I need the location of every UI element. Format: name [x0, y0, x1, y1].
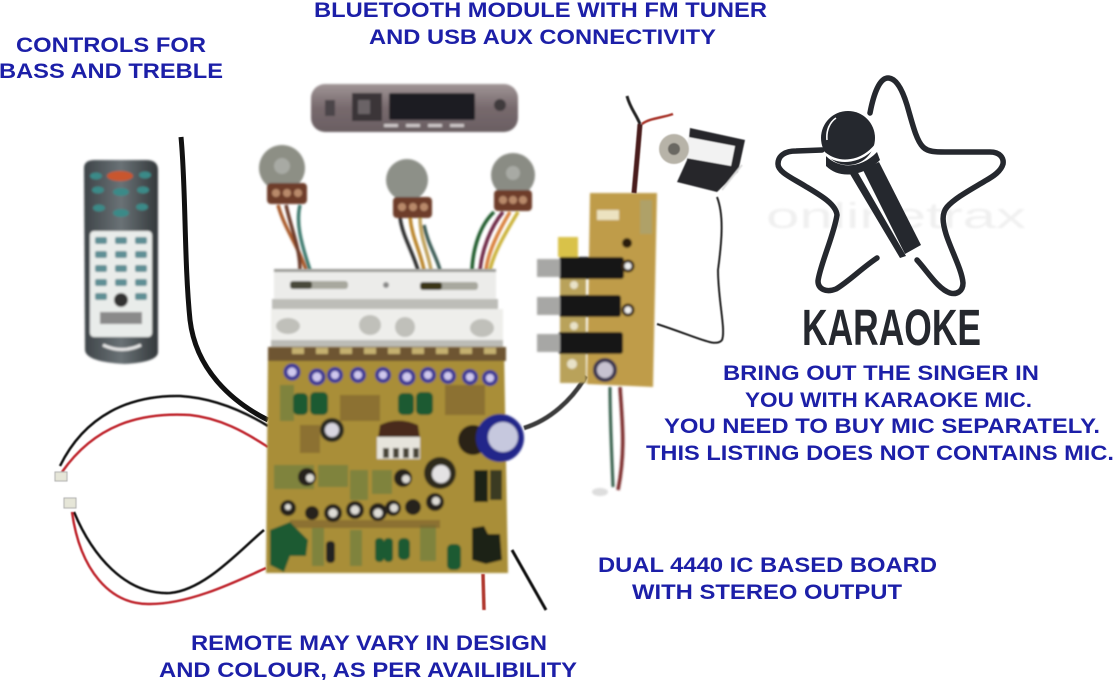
left speaker wires [55, 396, 268, 604]
potentiometers with wires [259, 145, 535, 270]
text: karaoke note: YOU NEED TO BUY MIC SEPARATELY. [664, 415, 1100, 438]
big capacitor [458, 425, 488, 455]
text: dual 4440 board [598, 554, 937, 604]
microphone [821, 111, 921, 258]
jack input board [537, 193, 657, 496]
amplifier board [266, 269, 524, 573]
circuit board [266, 347, 524, 573]
watermark: onlinetrax [766, 195, 1026, 236]
text: remote note: REMOTE MAY VARY IN DESIGN [191, 632, 547, 655]
icon: remote control [84, 160, 158, 364]
heading: controls for bass and treble [0, 34, 223, 83]
heading: controls for bass and treble: BASS AND TREBLE [0, 60, 223, 83]
black wire: side cable [181, 137, 268, 420]
star outline [870, 78, 1003, 294]
icon: bluetooth module [311, 84, 518, 132]
heat sink [271, 269, 503, 349]
heading: bluetooth module: AND USB AUX CONNECTIVITY [369, 26, 716, 49]
heading: bluetooth module [314, 0, 767, 49]
ic [378, 420, 420, 438]
texture patches [274, 385, 436, 566]
text: karaoke note: YOU WITH KARAOKE MIC. [745, 389, 1032, 412]
text: karaoke note: BRING OUT THE SINGER IN [723, 362, 1039, 385]
text: karaoke note [646, 362, 1114, 465]
dark components right side [472, 470, 502, 564]
heading: controls for bass and treble: CONTROLS FOR [16, 34, 206, 57]
green caps [270, 392, 461, 572]
text: dual 4440 board: DUAL 4440 IC BASED BOARD [598, 554, 937, 577]
text: remote note [159, 632, 577, 680]
jack socket with red and black wires [627, 96, 745, 343]
icon: karaoke star with microphone [778, 78, 1003, 294]
label: karaoke: KARAOKE [802, 299, 981, 356]
wires below board [483, 376, 586, 610]
text: dual 4440 board: WITH STEREO OUTPUT [632, 581, 902, 604]
text: karaoke note: THIS LISTING DOES NOT CONTAINS MIC. [646, 442, 1114, 465]
purple capacitors [286, 366, 496, 384]
